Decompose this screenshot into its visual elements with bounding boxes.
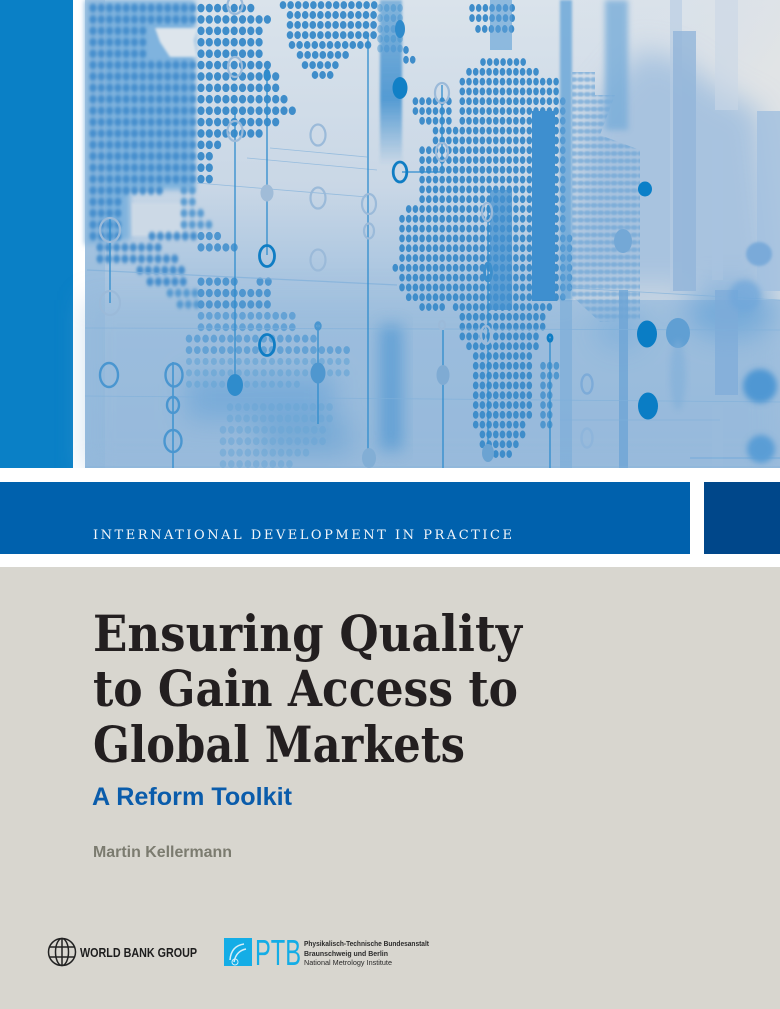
logo: PTB: National Metrology Institute — [304, 958, 392, 967]
Greenland — [283, 5, 377, 75]
title — [93, 604, 524, 774]
title: Global Markets — [93, 715, 465, 774]
Asia faded dots — [572, 70, 642, 325]
North America — [93, 8, 348, 464]
horizontal and vertical connector lines — [85, 35, 780, 468]
translucent vertical columns — [380, 0, 780, 468]
dark blue square — [704, 482, 780, 554]
left blue bar — [0, 0, 73, 468]
series band — [0, 482, 690, 554]
author: Martin Kellermann — [93, 844, 232, 861]
series name: INTERNATIONAL DEVELOPMENT IN PRACTICE — [93, 528, 512, 543]
title: Ensuring Quality — [93, 604, 524, 663]
world map dots — [93, 5, 642, 464]
cover artwork: world map and data graphic — [0, 0, 780, 468]
lower title panel — [0, 567, 780, 1009]
subtitle: A Reform Toolkit — [92, 783, 293, 811]
data point rings and nodes — [100, 0, 777, 468]
Scandinavia, Europe and Africa — [380, 8, 576, 454]
blurred cloud shapes — [85, 50, 780, 470]
icon: PTB square — [224, 938, 252, 966]
icon: globe — [48, 938, 76, 966]
light inland patches — [132, 28, 198, 236]
artwork background — [85, 0, 780, 468]
logo: PTB: PTB — [255, 932, 301, 973]
logo: World Bank Group — [48, 938, 197, 966]
title: to Gain Access to — [93, 659, 518, 718]
logo: PTB: Braunschweig und Berlin — [304, 949, 388, 958]
logo: PTB: Physikalisch-Technische Bundesanstalt — [304, 939, 429, 948]
logo: World Bank Group: WORLD BANK GROUP — [80, 945, 197, 960]
logo: PTB — [224, 932, 429, 973]
